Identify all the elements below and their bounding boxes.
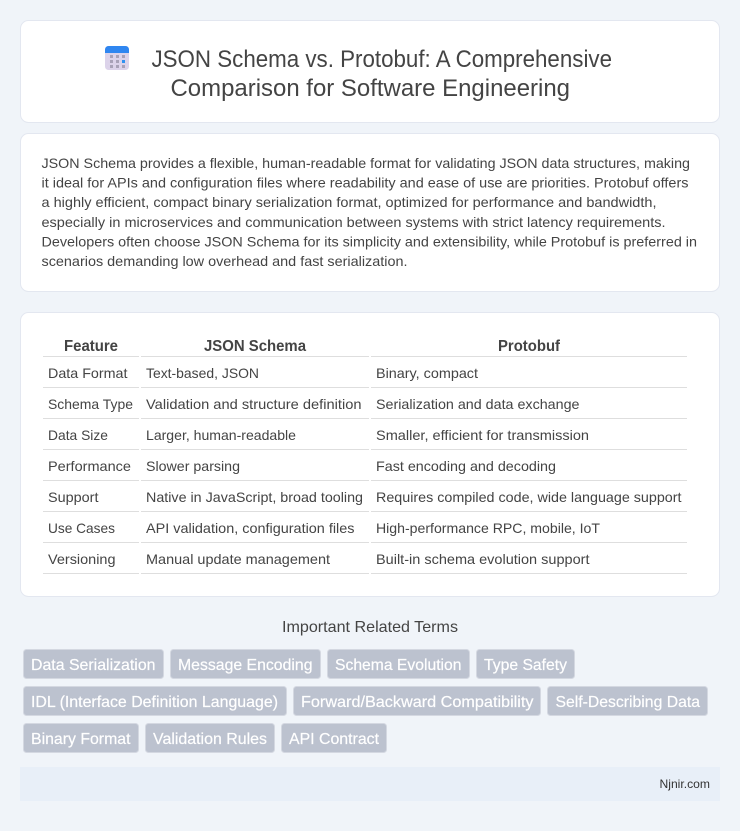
table row: data format: Binary, compact: [376, 365, 478, 381]
tag: data serialization: Data Serialization: [31, 657, 156, 674]
table row: versioning: [43, 551, 687, 574]
text block: summary paragraph: Developers often choose JSON Schema for its simplicity and extensibility, while Protobuf is preferred in: [42, 233, 697, 249]
tag: binary format: [24, 724, 138, 752]
text block: summary paragraph: [42, 155, 697, 269]
table header row: Feature: [64, 338, 118, 355]
table header row: [43, 338, 687, 356]
table row: schema type: Validation and structure definition: [146, 396, 362, 412]
table row: versioning: Versioning: [48, 551, 116, 567]
table row: versioning: Manual update management: [146, 551, 330, 567]
table row: schema type: Schema Type: [48, 396, 133, 412]
text block: summary paragraph: a highly efficient, compact binary serialization format, optimized for performance and bandwidth,: [42, 194, 656, 210]
table row: use cases: API validation, configuration files: [146, 520, 354, 536]
tag: binary format: Binary Format: [31, 731, 131, 748]
table header row: JSON Schema: [204, 338, 306, 355]
tag: self-describing data: [548, 686, 708, 716]
tag: schema evolution: Schema Evolution: [335, 657, 462, 674]
text block: summary paragraph: scenarios demanding low overhead and fast serialization.: [42, 253, 408, 269]
tag: idl: [24, 686, 286, 716]
table row: performance: Fast encoding and decoding: [376, 458, 556, 474]
tag: type safety: Type Safety: [484, 657, 567, 674]
table row: use cases: High-performance RPC, mobile, IoT: [376, 520, 600, 536]
table row: use cases: Use Cases: [48, 520, 115, 536]
tag: forward/backward compatibility: [294, 686, 540, 716]
panel: related term tags: [24, 650, 708, 752]
tag: api contract: [282, 724, 386, 752]
panel: title header: [20, 20, 720, 122]
title: Comparison for Software Engineering: [170, 75, 570, 102]
table row: support: Native in JavaScript, broad tooling: [146, 489, 363, 505]
footer: [20, 767, 720, 801]
tag: message encoding: Message Encoding: [178, 657, 312, 674]
table row: support: [43, 489, 687, 512]
table row: data size: Smaller, efficient for transmission: [376, 427, 589, 443]
tag: schema evolution: [328, 650, 470, 678]
title: [152, 46, 612, 102]
table row: data size: Larger, human-readable: [146, 427, 296, 443]
table row: schema type: Serialization and data exchange: [376, 396, 580, 412]
table row: data size: [43, 427, 687, 450]
text block: summary paragraph: it ideal for APIs and configuration files where readability and ease of use are priorities. Protobuf offers: [42, 175, 688, 191]
table row: versioning: Built-in schema evolution support: [376, 551, 590, 567]
table row: support: Support: [48, 489, 99, 505]
tag: data serialization: [24, 650, 164, 678]
text block: summary paragraph: especially in microservices and communication between systems with strict latency requirements.: [42, 214, 666, 230]
text block: summary paragraph: JSON Schema provides a flexible, human-readable format for validating JSON data structures, making: [42, 155, 690, 171]
table row: performance: [43, 458, 687, 480]
table row: data size: Data Size: [48, 427, 108, 443]
tag: type safety: [476, 650, 574, 678]
panel: introduction text: [20, 134, 720, 292]
tag: idl: IDL (Interface Definition Language): [31, 694, 278, 711]
tag: self-describing data: Self-Describing Data: [556, 694, 700, 711]
table row: data format: Data Format: [48, 365, 128, 381]
footer: Njnir.com: [660, 777, 710, 791]
table row: performance: Slower parsing: [146, 458, 240, 474]
title: JSON Schema vs. Protobuf: A Comprehensive: [152, 46, 612, 73]
table row: data format: Text-based, JSON: [146, 365, 259, 381]
tag: api contract: API Contract: [289, 731, 380, 748]
tag: message encoding: [170, 650, 320, 678]
table row: schema type: [43, 396, 687, 418]
icon: calendar: [105, 46, 129, 70]
table row: use cases: [43, 520, 687, 542]
panel: comparison table: [20, 312, 720, 596]
tag: validation rules: [146, 724, 274, 752]
heading: important related terms: Important Related Terms: [282, 619, 458, 636]
tag: validation rules: Validation Rules: [153, 731, 267, 748]
table row: support: Requires compiled code, wide language support: [376, 489, 682, 505]
table header row: Protobuf: [498, 338, 561, 355]
table row: data format: [43, 365, 687, 388]
table row: performance: Performance: [48, 458, 131, 474]
tag: forward/backward compatibility: Forward/Backward Compatibility: [301, 694, 534, 711]
